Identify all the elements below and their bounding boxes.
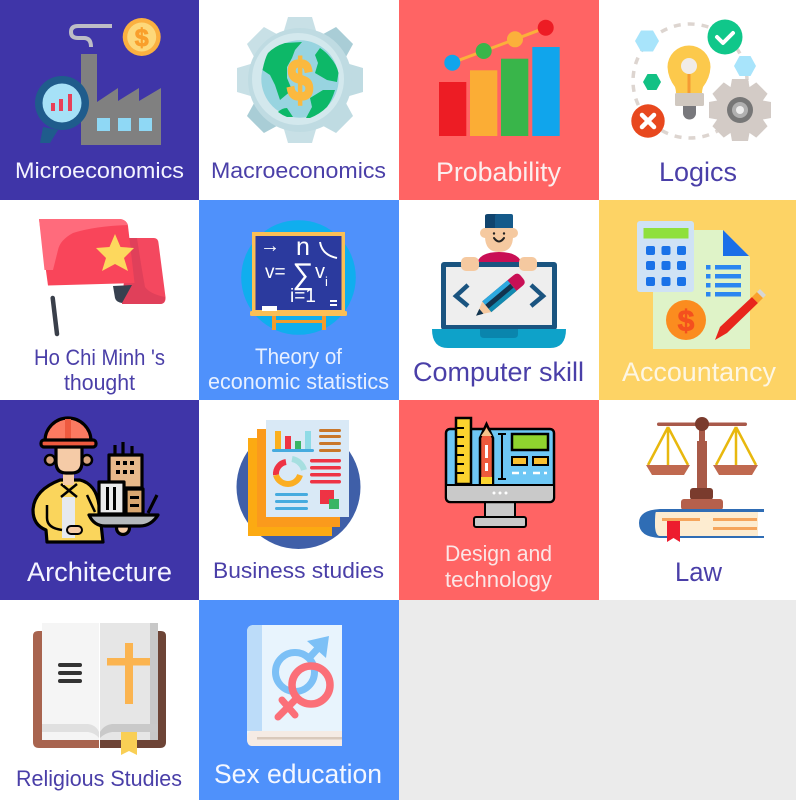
label: Computer skill: Computer skill [413,357,584,387]
panel: Religious Studies [0,600,199,800]
label: Design and technology: technology [445,567,553,592]
panel: Architecture [0,400,199,600]
label: Probability: Probability [436,157,561,187]
label: Microeconomics: Microeconomics [15,158,184,183]
label: Law: Law [675,557,722,587]
icon: globe in gear with dollar [237,17,363,143]
icon: monitor with design tools [446,418,554,527]
icon: open bible with cross [33,623,166,755]
icon: blackboard with formula: ∑ [292,258,314,291]
label: Theory of economic statistics: economic statistics [208,369,389,394]
panel: Microeconomics [0,0,199,200]
icon: blackboard with formula: v [315,261,325,283]
panel: Accountancy [599,200,796,400]
label: Theory of economic statistics [208,344,389,394]
icon: person behind laptop with pencil [432,214,566,348]
icon: factory with coin and magnifier: $ [135,24,149,52]
panel: Computer skill [399,200,599,400]
icon: blackboard with formula: n [296,233,310,261]
label: Accountancy: Accountancy [622,357,776,387]
icon: bar chart with trend line [439,20,560,136]
label: Logics: Logics [659,157,737,187]
icon: calculator, document and pen [637,221,766,349]
panel: Logics [599,0,796,200]
panel: Sex education [199,600,399,800]
label: Ho Chi Minh's thought: thought [64,370,135,395]
icon: red flag with star [39,219,166,334]
label: Design and technology: Design and [445,541,552,566]
label: Religious Studies: Religious Studies [16,766,182,791]
icon: factory with coin and magnifier [35,18,161,145]
panel: Macroeconomics [199,0,399,200]
icon: calculator, document and pen: $ [678,305,695,338]
panel: Law [599,400,796,600]
icon: light bulb, gear and marks [631,20,771,141]
panel: Business studies [199,400,399,600]
icon: blackboard with formula: i=1 [290,286,316,307]
icon: scales of justice on book [639,417,764,542]
label: Theory of economic statistics: Theory of [255,344,343,369]
icon: report documents over circle [236,420,360,549]
icon: blackboard with formula: v= [265,262,286,283]
label: Ho Chi Minh's thought: Ho Chi Minh 's [34,345,165,370]
label: Sex education: Sex education [214,759,382,789]
panel: Theory of economic statistics [199,200,399,400]
icon: book with gender symbols [247,625,342,746]
panel: Design and technology [399,400,599,600]
icon: blackboard with formula [241,220,356,335]
icon: blackboard with formula: i [325,274,328,289]
panel: Probability [399,0,599,200]
panel: Ho Chi Minh's thought [0,200,199,400]
label: Business studies: Business studies [213,558,384,583]
label: Ho Chi Minh's thought [34,345,165,395]
icon: globe in gear with dollar: $ [287,48,313,113]
label: Macroeconomics: Macroeconomics [211,158,386,183]
label: Architecture: Architecture [27,557,172,587]
icon: blackboard with formula: → [260,235,280,257]
label: Design and technology [445,541,553,592]
icon: architect with building model [33,418,158,542]
